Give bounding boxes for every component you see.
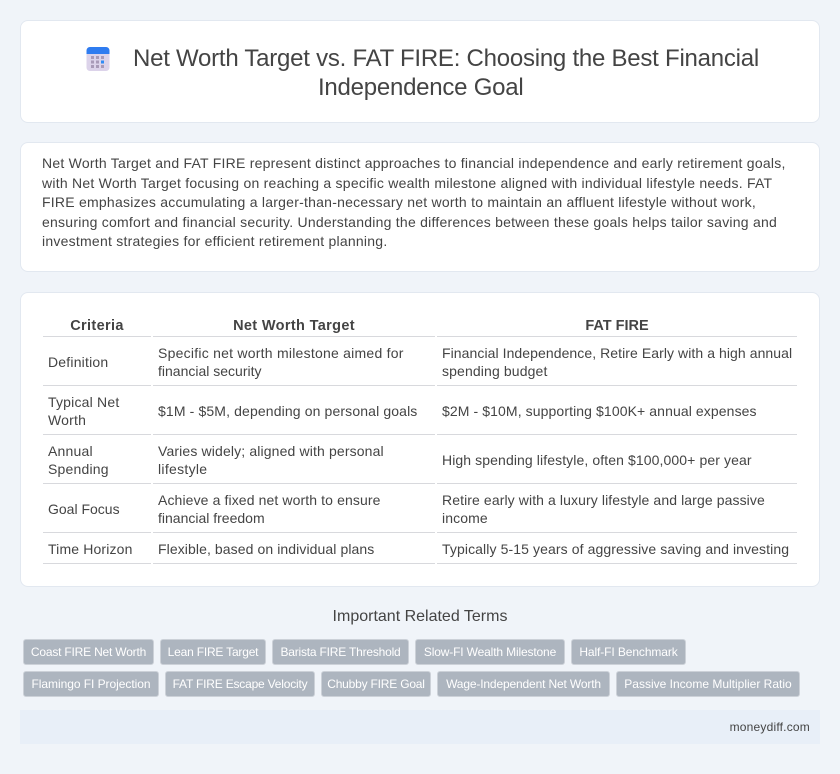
row: annual spending: lifestyle	[158, 461, 207, 477]
related term tags: Wage-Independent Net Worth	[446, 677, 601, 691]
row: time horizon: Time Horizon	[48, 541, 133, 557]
footer text: moneydiff.com	[730, 720, 810, 734]
text block: introduction paragraph: ensuring comfort and financial security. Understanding the differences between these goals helps tailor saving and	[42, 214, 777, 230]
row: annual spending: Varies widely; aligned with personal	[158, 443, 384, 459]
row: definition: Specific net worth milestone aimed for	[158, 345, 404, 361]
title: Net Worth Target vs. FAT FIRE: Choosing the Best Financial	[133, 45, 759, 72]
row: goal focus: financial freedom	[158, 510, 265, 526]
heading: related terms: Important Related Terms	[333, 608, 507, 625]
row: annual spending: Annual	[48, 443, 93, 459]
row: typical net worth	[48, 394, 757, 428]
row: typical net worth: $2M - $10M, supporting $100K+ annual expenses	[442, 403, 757, 419]
row: definition: financial security	[158, 363, 262, 379]
row: goal focus	[48, 492, 765, 526]
table header	[70, 318, 649, 334]
icon: calendar	[86, 47, 110, 71]
row: definition	[48, 345, 792, 379]
related term tags: Chubby FIRE Goal	[327, 677, 425, 691]
row: annual spending: High spending lifestyle, often $100,000+ per year	[442, 452, 752, 468]
footer bar	[20, 710, 820, 744]
row: annual spending: Spending	[48, 461, 109, 477]
related term tags: Barista FIRE Threshold	[280, 645, 401, 659]
related term tags: Lean FIRE Target	[168, 645, 258, 659]
text block: introduction paragraph: Net Worth Target and FAT FIRE represent distinct approaches to financial independence and early retirement goals,	[42, 155, 786, 171]
related term tags: Coast FIRE Net Worth	[31, 645, 146, 659]
row: typical net worth: Typical Net	[48, 394, 119, 410]
row: typical net worth: Worth	[48, 412, 86, 428]
panel: title card	[20, 20, 820, 123]
panel: comparison table	[20, 292, 820, 587]
row: time horizon: Typically 5-15 years of aggressive saving and investing	[442, 541, 789, 557]
row: annual spending	[48, 443, 752, 477]
table header: FAT FIRE	[585, 318, 649, 334]
row: goal focus: Retire early with a luxury lifestyle and large passive	[442, 492, 765, 508]
text block: introduction paragraph: investment strategies for efficient retirement planning.	[42, 233, 387, 249]
related term tags: Slow-FI Wealth Milestone	[424, 645, 556, 659]
row: definition: spending budget	[442, 363, 548, 379]
table header: Criteria	[70, 318, 124, 334]
row: definition: Definition	[48, 354, 108, 370]
title: Independence Goal	[318, 74, 523, 101]
row: goal focus: Goal Focus	[48, 501, 120, 517]
table header: Net Worth Target	[233, 318, 355, 334]
row: goal focus: Achieve a fixed net worth to ensure	[158, 492, 381, 508]
title	[133, 45, 759, 101]
text block: introduction paragraph: FIRE emphasizes accumulating a larger-than-necessary net worth to maintain an affluent lifestyle without work,	[42, 194, 756, 210]
text block: introduction paragraph: with Net Worth Target focusing on reaching a specific wealth milestone aligned with individual lifestyle needs. FAT	[42, 175, 772, 191]
row: time horizon: Flexible, based on individual plans	[158, 541, 374, 557]
row: definition: Financial Independence, Retire Early with a high annual	[442, 345, 792, 361]
related term tags: Passive Income Multiplier Ratio	[624, 677, 792, 691]
panel: introduction	[20, 142, 820, 272]
row: goal focus: income	[442, 510, 488, 526]
related term tags: Half-FI Benchmark	[579, 645, 678, 659]
related term tags: FAT FIRE Escape Velocity	[173, 677, 307, 691]
row: typical net worth: $1M - $5M, depending on personal goals	[158, 403, 417, 419]
related term tags: Flamingo FI Projection	[32, 677, 150, 691]
text block: introduction paragraph	[42, 155, 786, 249]
row: time horizon	[48, 541, 789, 557]
